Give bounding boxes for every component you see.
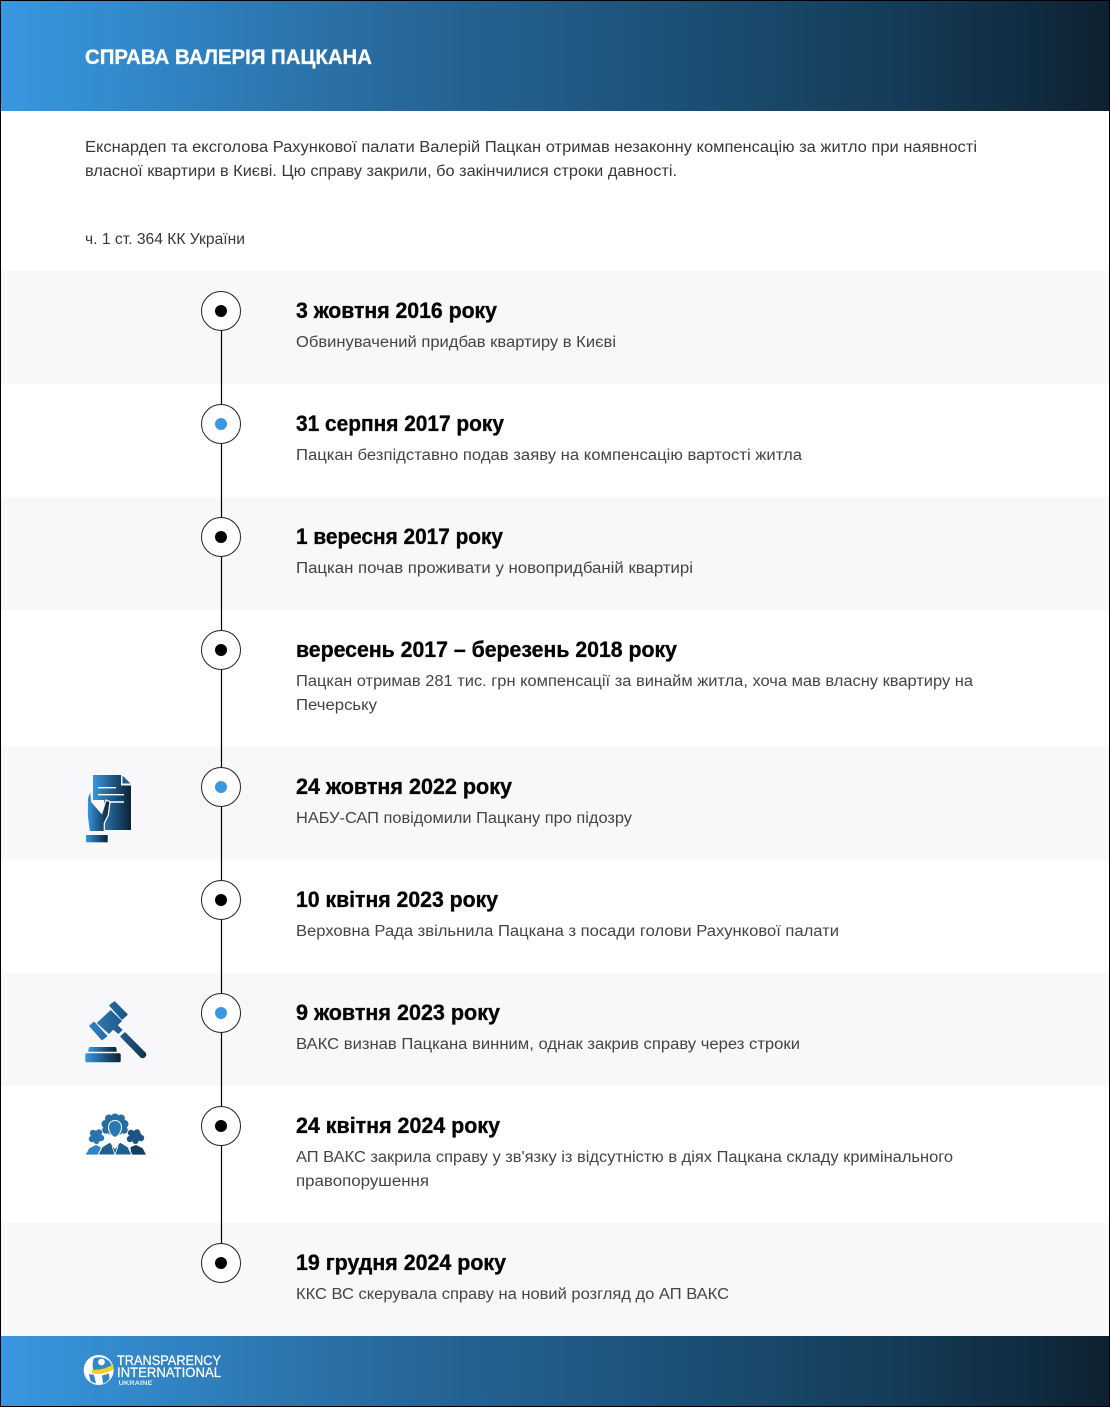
timeline event: 9 October 2023: 9 жовтня 2023 року <box>296 1000 501 1025</box>
timeline event: 19 December 2024: 19 грудня 2024 року <box>296 1250 507 1275</box>
timeline event: 9 October 2023 <box>202 994 800 1053</box>
timeline event: 31 August 2017: 31 серпня 2017 року <box>296 411 505 436</box>
timeline event: 3 October 2016: 3 жовтня 2016 року <box>296 298 498 323</box>
timeline axis line <box>220 311 222 1263</box>
footer banner <box>0 1336 1110 1407</box>
logo: Transparency International Ukraine: INTERNATIONAL <box>117 1365 221 1380</box>
timeline event: 24 October 2022: 24 жовтня 2022 року <box>296 774 513 799</box>
timeline event: September 2017 to March 2018: Печерську <box>296 697 377 714</box>
timeline row backgrounds <box>0 271 1110 1336</box>
timeline event: 24 April 2024: АП ВАКС закрила справу у зв'язку із відсутністю в діях Пацкана складу кримінального <box>296 1149 953 1166</box>
timeline event: September 2017 to March 2018: Пацкан отримав 281 тис. грн компенсації за винайм житла, хоча мав власну квартиру на <box>296 673 973 690</box>
timeline event: 19 December 2024 <box>202 1244 729 1303</box>
timeline event: 3 October 2016 <box>202 292 616 351</box>
timeline event: 1 September 2017: 1 вересня 2017 року <box>296 524 504 549</box>
timeline event: 9 October 2023: ВАКС визнав Пацкана винним, однак закрив справу через строки <box>296 1036 800 1053</box>
timeline event: 24 April 2024: 24 квітня 2024 року <box>296 1113 501 1138</box>
timeline event: 24 October 2022: НАБУ-САП повідомили Пацкану про підозру <box>296 810 632 827</box>
icon: hand holding document <box>86 775 131 842</box>
timeline event: September 2017 to March 2018 <box>202 630 973 714</box>
timeline event: 1 September 2017 <box>202 518 693 577</box>
header banner <box>0 0 1110 111</box>
icon: gavel <box>85 1002 146 1062</box>
legal article reference: ч. 1 ст. 364 КК України <box>85 231 245 248</box>
timeline event: 24 April 2024: правопорушення <box>296 1173 429 1190</box>
intro text: власної квартири в Києві. Цю справу закрили, бо закінчилися строки давності. <box>85 163 677 180</box>
timeline event: 24 October 2022 <box>202 768 632 827</box>
logo: Transparency International Ukraine: TRANSPARENCY <box>117 1353 221 1368</box>
timeline event: 10 April 2023: Верховна Рада звільнила Пацкана з посади голови Рахункової палати <box>296 923 839 940</box>
icon: group of judges <box>85 1114 146 1155</box>
intro text <box>85 139 977 180</box>
timeline event: 24 April 2024 <box>202 1106 953 1190</box>
title: СПРАВА ВАЛЕРІЯ ПАЦКАНА <box>85 46 372 69</box>
logo: Transparency International Ukraine <box>84 1353 221 1387</box>
timeline event: 19 December 2024: ККС ВС скерувала справу на новий розгляд до АП ВАКС <box>296 1286 729 1303</box>
timeline event: 10 April 2023: 10 квітня 2023 року <box>296 887 499 912</box>
timeline event: 1 September 2017: Пацкан почав проживати у новопридбаній квартирі <box>296 560 693 577</box>
logo: Transparency International Ukraine: UKRAINE <box>118 1380 153 1387</box>
timeline event: September 2017 to March 2018: вересень 2017 – березень 2018 року <box>296 637 678 662</box>
timeline event: 3 October 2016: Обвинувачений придбав квартиру в Києві <box>296 334 616 351</box>
timeline event: 10 April 2023 <box>202 880 839 940</box>
intro text: Екснардеп та ексголова Рахункової палати Валерій Пацкан отримав незаконну компенсацію за житло при наявності <box>85 139 977 156</box>
timeline event: 31 August 2017 <box>202 404 802 464</box>
timeline event: 31 August 2017: Пацкан безпідставно подав заяву на компенсацію вартості житла <box>296 447 802 464</box>
